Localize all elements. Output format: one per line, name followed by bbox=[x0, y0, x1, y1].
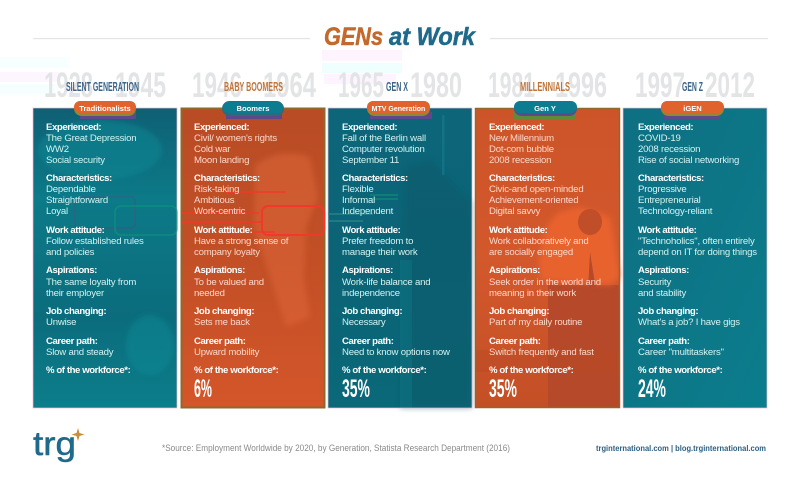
text list: Loyal bbox=[46, 206, 68, 217]
text list: Aspirations: bbox=[194, 265, 245, 276]
year range: 1964 bbox=[263, 66, 316, 105]
title: GENs bbox=[324, 23, 383, 51]
text list bbox=[342, 122, 450, 403]
text list: Flexible bbox=[342, 184, 373, 195]
text list: Characteristics: bbox=[194, 173, 260, 184]
logo: trg: trg bbox=[33, 425, 76, 462]
text list: Upward mobility bbox=[194, 347, 260, 358]
text list bbox=[638, 122, 757, 403]
text list: Part of my daily routine bbox=[489, 317, 582, 328]
pill label: Traditionalists bbox=[79, 104, 131, 113]
text list: and policies bbox=[46, 247, 95, 258]
text list: Career path: bbox=[342, 336, 394, 347]
text list: Work attitude: bbox=[489, 225, 548, 236]
text list: The Great Depression bbox=[46, 133, 136, 144]
text list: needed bbox=[194, 288, 225, 299]
text list: Career path: bbox=[638, 336, 690, 347]
text list: Seek order in the world and bbox=[489, 277, 601, 288]
text list: Work attitude: bbox=[46, 225, 105, 236]
text list: Rise of social networking bbox=[638, 155, 739, 166]
year range bbox=[338, 66, 462, 105]
text list: % of the workforce*: bbox=[342, 365, 427, 376]
text list bbox=[489, 122, 601, 403]
year range: 2012 bbox=[705, 66, 755, 105]
text list: Career path: bbox=[46, 336, 98, 347]
pill label bbox=[514, 101, 577, 119]
card background bbox=[181, 108, 325, 408]
text list: Characteristics: bbox=[342, 173, 408, 184]
generation name: BABY BOOMERS bbox=[224, 79, 283, 94]
text list: Job changing: bbox=[638, 306, 698, 317]
text list: Aspirations: bbox=[489, 265, 540, 276]
text list: 2008 recession bbox=[489, 155, 551, 166]
text list: company loyalty bbox=[194, 247, 260, 258]
website links: trginternational.com | blog.trginternational.com bbox=[596, 443, 766, 453]
pill label bbox=[367, 101, 432, 119]
text list: Experienced: bbox=[638, 122, 693, 133]
source note: *Source: Employment Worldwide by 2020, by Generation, Statista Research Department (2016) bbox=[162, 443, 510, 453]
text list: Career path: bbox=[489, 336, 541, 347]
text list: % of the workforce*: bbox=[194, 365, 279, 376]
text list: Security bbox=[638, 277, 671, 288]
text list: independence bbox=[342, 288, 400, 299]
text list: Digital savvy bbox=[489, 206, 541, 217]
text list: 2008 recession bbox=[638, 144, 700, 155]
text list: Career "multitaskers" bbox=[638, 347, 724, 358]
title bbox=[324, 23, 476, 51]
text list: To be valued and bbox=[194, 277, 264, 288]
text list: meaning in their work bbox=[489, 288, 576, 299]
text list: Civic-and open-minded bbox=[489, 184, 583, 195]
title: at Work bbox=[389, 23, 476, 51]
year range bbox=[635, 66, 755, 105]
year range: 1980 bbox=[410, 66, 462, 105]
text list: Ambitious bbox=[194, 195, 235, 206]
text list: % of the workforce*: bbox=[638, 365, 723, 376]
text list: Necessary bbox=[342, 317, 386, 328]
text list: Fall of the Berlin wall bbox=[342, 133, 426, 144]
generation name: GEN X bbox=[386, 79, 408, 94]
text list: Characteristics: bbox=[638, 173, 704, 184]
text list: Progressive bbox=[638, 184, 686, 195]
year range bbox=[44, 66, 166, 105]
year range: 1996 bbox=[555, 66, 607, 105]
year range: 1928 bbox=[44, 66, 93, 105]
panel: baby boomers bbox=[181, 66, 325, 408]
pill label bbox=[74, 101, 136, 119]
text list: Job changing: bbox=[194, 306, 254, 317]
text list: Job changing: bbox=[489, 306, 549, 317]
year range: 1997 bbox=[635, 66, 685, 105]
text list: 6% bbox=[194, 375, 212, 403]
text list: Work-centric bbox=[194, 206, 246, 217]
text list: Dependable bbox=[46, 184, 96, 195]
text list: Work attitude: bbox=[638, 225, 697, 236]
text list: Cold war bbox=[194, 144, 231, 155]
text list: Work attitude: bbox=[342, 225, 401, 236]
text list: and stability bbox=[638, 288, 686, 299]
generation name: GEN Z bbox=[682, 79, 703, 94]
text list bbox=[46, 122, 144, 376]
generation name: SILENT GENERATION bbox=[66, 79, 139, 94]
text list: Need to know options now bbox=[342, 347, 450, 358]
pill label bbox=[661, 101, 724, 119]
year range bbox=[488, 66, 607, 105]
text list: Prefer freedom to bbox=[342, 236, 413, 247]
text list: Experienced: bbox=[46, 122, 101, 133]
text list: Straightforward bbox=[46, 195, 108, 206]
pill label bbox=[222, 101, 284, 119]
text list: What's a job? I have gigs bbox=[638, 317, 740, 328]
year range: 1946 bbox=[192, 66, 242, 105]
year range: 1945 bbox=[115, 66, 166, 105]
panel: silent generation bbox=[33, 66, 177, 408]
panel: gen x bbox=[328, 66, 472, 408]
text list: Work-life balance and bbox=[342, 277, 430, 288]
text list: Experienced: bbox=[489, 122, 544, 133]
text list: Follow established rules bbox=[46, 236, 144, 247]
text list: are socially engaged bbox=[489, 247, 573, 258]
text list: their employer bbox=[46, 288, 105, 299]
text list: Unwise bbox=[46, 317, 76, 328]
text list: Dot-com bubble bbox=[489, 144, 554, 155]
workforce share: 24% bbox=[638, 375, 666, 403]
text list: % of the workforce*: bbox=[489, 365, 574, 376]
text list: WW2 bbox=[46, 144, 69, 155]
panel: millennials bbox=[475, 66, 620, 408]
pill label: Gen Y bbox=[534, 104, 556, 113]
year range: 1965 bbox=[338, 66, 384, 105]
text list: COVID-19 bbox=[638, 133, 681, 144]
workforce share: 35% bbox=[342, 375, 370, 403]
text list: Sets me back bbox=[194, 317, 250, 328]
text list: Work attitude: bbox=[194, 225, 253, 236]
card background bbox=[475, 108, 620, 408]
generation name: MILLENNIALS bbox=[520, 79, 570, 94]
pill label: MTV Generation bbox=[372, 106, 425, 113]
text list: "Technoholics", often entirely bbox=[638, 236, 755, 247]
text list: Switch frequently and fast bbox=[489, 347, 594, 358]
text list bbox=[194, 122, 289, 403]
text list: Entrepreneurial bbox=[638, 195, 701, 206]
text list: The same loyalty from bbox=[46, 277, 136, 288]
card background bbox=[33, 108, 177, 408]
text list: Informal bbox=[342, 195, 375, 206]
text list: Social security bbox=[46, 155, 105, 166]
text list: September 11 bbox=[342, 155, 399, 166]
text list: Civil/ women's rights bbox=[194, 133, 277, 144]
text list: % of the workforce*: bbox=[46, 365, 131, 376]
text list: Experienced: bbox=[194, 122, 249, 133]
text list: Aspirations: bbox=[638, 265, 689, 276]
text list: Characteristics: bbox=[46, 173, 112, 184]
text list: Moon landing bbox=[194, 155, 249, 166]
panel: gen z bbox=[623, 66, 767, 408]
text list: Have a strong sense of bbox=[194, 236, 289, 247]
text list: Aspirations: bbox=[46, 265, 97, 276]
pill label: Boomers bbox=[237, 104, 269, 113]
text list: Slow and steady bbox=[46, 347, 114, 358]
text list: New Millennium bbox=[489, 133, 554, 144]
text list: Experienced: bbox=[342, 122, 397, 133]
text list: Computer revolution bbox=[342, 144, 425, 155]
text list: Risk-taking bbox=[194, 184, 239, 195]
text list: Career path: bbox=[194, 336, 246, 347]
text list: Job changing: bbox=[342, 306, 402, 317]
text list: Characteristics: bbox=[489, 173, 555, 184]
text list: manage their work bbox=[342, 247, 418, 258]
text list: Achievement-oriented bbox=[489, 195, 578, 206]
text list: Job changing: bbox=[46, 306, 106, 317]
year range: 1981 bbox=[488, 66, 535, 105]
card background bbox=[623, 108, 767, 408]
year range bbox=[192, 66, 316, 105]
text list: Aspirations: bbox=[342, 265, 393, 276]
text list: Technology-reliant bbox=[638, 206, 713, 217]
card background bbox=[328, 108, 472, 408]
text list: depend on IT for doing things bbox=[638, 247, 757, 258]
text list: Work collaboratively and bbox=[489, 236, 589, 247]
pill label: iGEN bbox=[683, 104, 702, 113]
text list: Independent bbox=[342, 206, 394, 217]
workforce share: 35% bbox=[489, 375, 517, 403]
